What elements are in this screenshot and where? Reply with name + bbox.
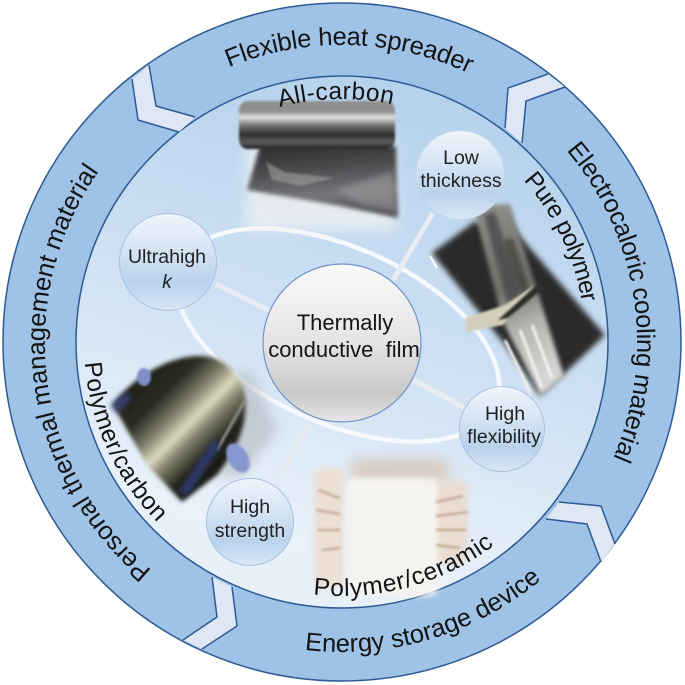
ring label: flexible heat spreader: Flexible heat spreader <box>224 27 474 72</box>
white ellipse orbit <box>145 185 531 485</box>
photo: pure polymer film <box>430 204 605 396</box>
photo: polymer/ceramic garment <box>314 458 468 596</box>
central circle: thermally conductive film <box>263 264 421 422</box>
connector: low thickness <box>393 213 433 280</box>
connector: ultrahigh k <box>216 284 270 311</box>
bubble: ultrahigh k: Ultrahigh <box>128 246 206 268</box>
ring label: electrocaloric cooling material: Electrocaloric cooling material <box>568 140 656 464</box>
bubble: high strength: strength <box>215 520 285 542</box>
ring label: energy storage device: Energy storage device <box>306 572 539 656</box>
bubble: high flexibility: High <box>485 403 525 425</box>
inner disc <box>76 76 608 608</box>
central circle: thermally conductive film: Thermally <box>297 310 393 335</box>
bubble: high strength: High <box>230 496 270 518</box>
bubble: ultrahigh k: k <box>162 271 173 293</box>
arrow: bottom-left chevron <box>183 577 237 649</box>
bubble: ultrahigh k <box>120 214 216 310</box>
photo label: polymer/ceramic: Polymer/ceramic <box>315 537 492 601</box>
photo label: polymer/carbon: Polymer/carbon <box>84 362 164 522</box>
central circle: thermally conductive film: conductive film <box>268 337 420 362</box>
photo: polymer/carbon film <box>110 356 278 502</box>
bubble: high flexibility <box>460 386 544 472</box>
arrow: top-left chevron <box>132 65 195 132</box>
connector: high flexibility <box>413 380 465 408</box>
bubble: low thickness <box>416 130 504 220</box>
photo label: all-carbon: All-carbon <box>280 82 393 107</box>
ring label: personal thermal management material: Personal thermal management material <box>31 162 150 582</box>
bubble: high flexibility: flexibility <box>467 426 541 448</box>
arrow: bottom-right chevron <box>546 502 615 562</box>
bubble: low thickness: Low <box>443 147 480 169</box>
arrow: top-right chevron <box>505 74 565 143</box>
photo: all-carbon film roll <box>239 101 398 230</box>
connector: high strength <box>277 425 310 480</box>
bubble: low thickness: thickness <box>420 170 502 192</box>
bubble: high strength <box>206 478 294 566</box>
photo label: pure polymer: Pure polymer <box>524 170 595 300</box>
